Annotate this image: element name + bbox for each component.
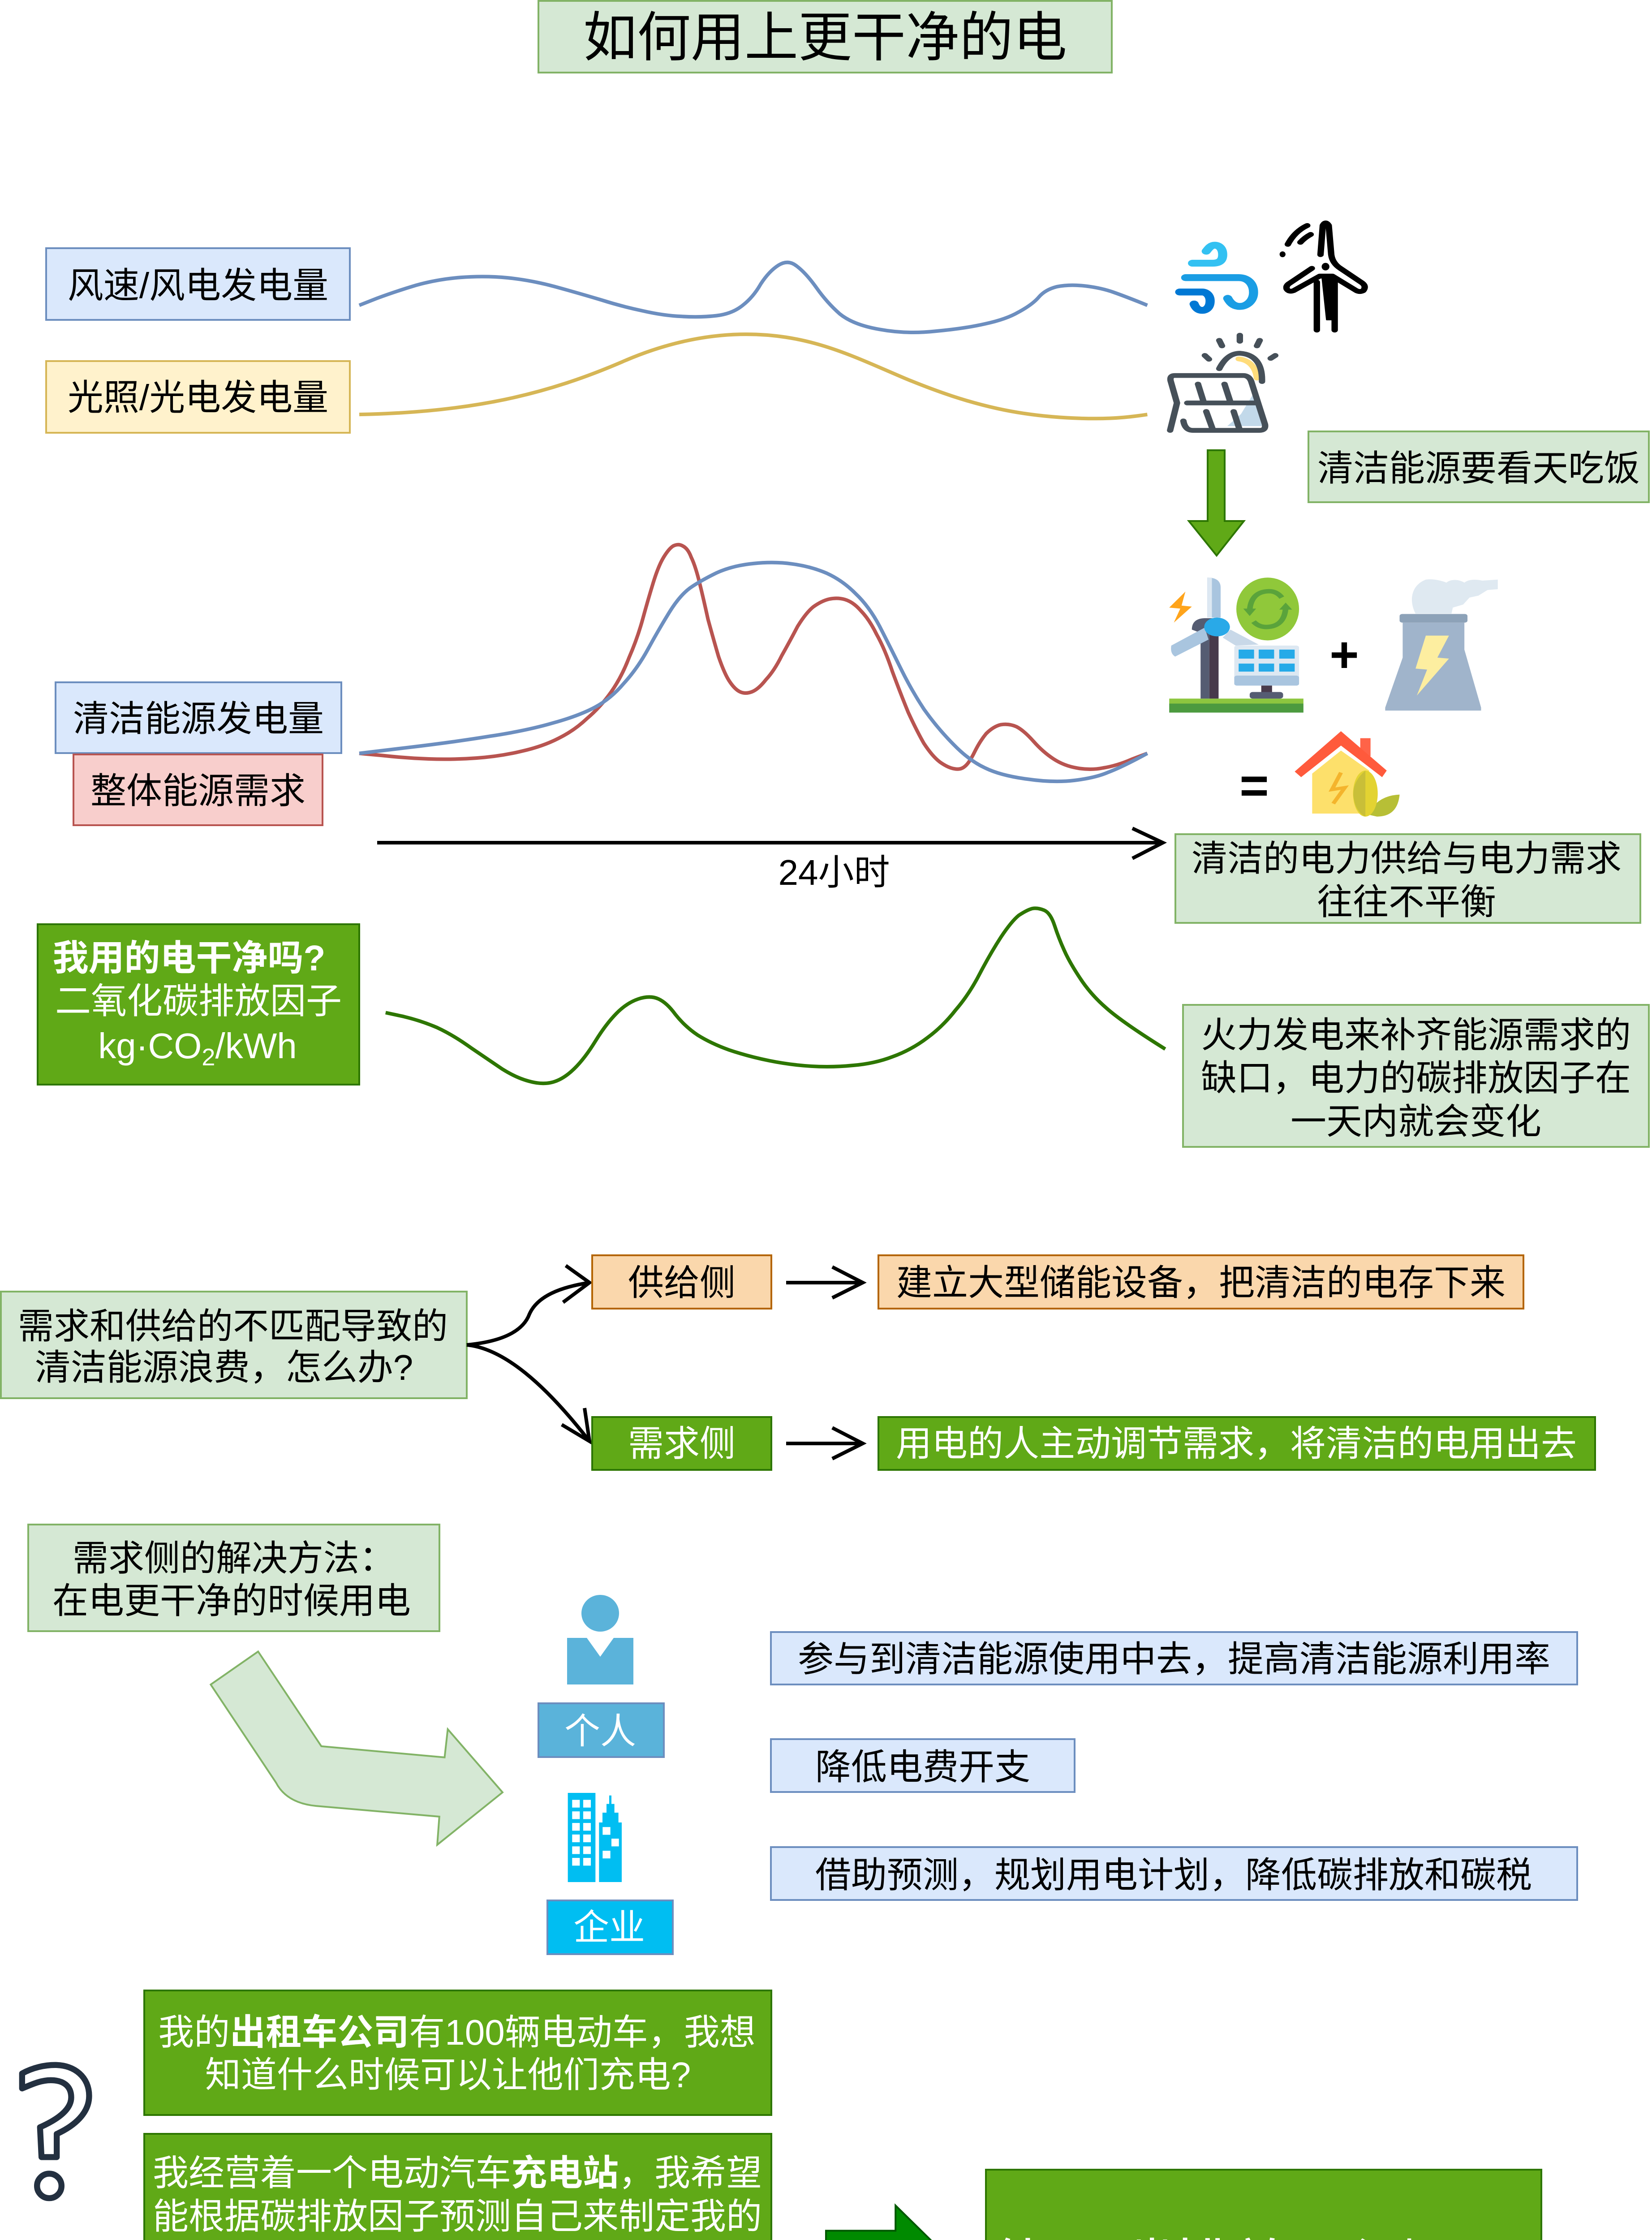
chart: clean generation curve <box>359 563 1147 781</box>
box: active demand adjustment: 用电的人主动调节需求，将清洁的电用出去 <box>896 1424 1577 1464</box>
callout: supply and demand imbalance: 清洁的电力供给与电力需求 <box>1192 839 1622 879</box>
box: company <box>547 1900 673 1954</box>
icon: wind and solar station <box>1169 577 1304 713</box>
label: solar power: 光照/光电发电量 <box>68 378 328 418</box>
arrow: 24-hour axis <box>377 828 1163 892</box>
panel: demand-side solution: 在电更干净的时候用电 <box>52 1581 411 1621</box>
box: supply side: 供给侧 <box>628 1263 736 1303</box>
scenario: charging station <box>144 2134 771 2240</box>
label: clean generation <box>56 682 341 753</box>
label: overall demand: 整体能源需求 <box>90 771 305 811</box>
label: solar power <box>46 361 350 433</box>
panel: carbon emission factor <box>38 924 359 1085</box>
box: individual <box>538 1703 664 1757</box>
arrow: down to combined sources <box>1189 450 1244 556</box>
panel: carbon emission factor: /kWh <box>215 1026 297 1066</box>
benefit: lower bills <box>771 1739 1075 1792</box>
label: wind power: 风速/风电发电量 <box>68 266 328 306</box>
chart: carbon factor curve <box>386 908 1165 1083</box>
box: individual: 个人 <box>564 1711 636 1751</box>
scenario: charging station: 能根据碳排放因子预测自己来制定我的 <box>153 2197 762 2236</box>
arrow: demand to adjustment <box>786 1428 863 1459</box>
arrow: to supply side <box>467 1266 589 1345</box>
callout: thermal power fills the gap: 火力发电来补齐能源需求的 <box>1201 1015 1631 1055</box>
scenario: taxi company: 我的出租车公司有100辆电动车，我想 <box>158 2012 756 2052</box>
scenario: charging station: 我经营着一个电动汽车充电站，我希望 <box>153 2153 762 2193</box>
callout: clean energy depends on weather: 清洁能源要看天吃饭 <box>1317 448 1640 488</box>
benefit: planning and lower carbon tax <box>771 1847 1577 1900</box>
callout: supply and demand imbalance <box>1175 834 1640 923</box>
icon: wind turbine <box>1280 223 1365 330</box>
box: company: 企业 <box>573 1908 645 1947</box>
icon: question mark <box>22 2065 89 2198</box>
box: demand side <box>592 1417 771 1470</box>
arrow: to forecasting tool <box>826 2206 968 2240</box>
panel: carbon emission factor: 2 <box>202 1044 215 1071</box>
box: supply side <box>592 1255 771 1309</box>
panel: carbon emission factor: 我用的电干净吗? <box>53 938 325 978</box>
callout: thermal power fills the gap <box>1183 1005 1649 1147</box>
arrow: supply to storage <box>786 1267 863 1298</box>
benefit: improve clean energy use: 参与到清洁能源使用中去，提高清洁能源利用率 <box>798 1639 1550 1679</box>
icon: wind <box>1180 245 1253 310</box>
question: mismatch waste: 需求和供给的不匹配导致的 <box>18 1306 448 1346</box>
callout: clean energy depends on weather <box>1308 431 1649 502</box>
icon: thermal power plant <box>1385 579 1498 711</box>
label: overall demand <box>73 754 323 825</box>
question: mismatch waste: 清洁能源浪费，怎么办? <box>35 1348 413 1387</box>
chart: demand curve <box>359 545 1147 769</box>
question: mismatch waste <box>1 1292 467 1398</box>
panel: use carbon forecasting tool <box>986 2170 1541 2240</box>
benefit: lower bills: 降低电费开支 <box>815 1747 1030 1787</box>
arrow: to demand side <box>467 1345 589 1441</box>
callout: supply and demand imbalance: 往往不平衡 <box>1317 882 1496 922</box>
arrow: bent to users <box>211 1651 503 1845</box>
title: 如何用上更干净的电 <box>583 8 1067 68</box>
box: demand side: 需求侧 <box>628 1424 736 1464</box>
plus sign: + <box>1329 627 1359 683</box>
callout: thermal power fills the gap: 一天内就会变化 <box>1291 1102 1541 1142</box>
label: clean generation: 清洁能源发电量 <box>73 699 324 739</box>
panel: carbon emission factor: kg·CO <box>98 1026 202 1066</box>
icon: green home <box>1295 731 1400 817</box>
panel: demand-side solution <box>28 1525 439 1631</box>
benefit: planning and lower carbon tax: 借助预测，规划用电计划，降低碳排放和碳税 <box>815 1855 1532 1895</box>
scenario: taxi company: 知道什么时候可以让他们充电? <box>205 2055 691 2095</box>
label: wind power <box>46 248 350 320</box>
chart: wind curve <box>359 263 1147 332</box>
panel: demand-side solution: 需求侧的解决方法： <box>73 1538 395 1578</box>
equals sign: = <box>1239 758 1269 814</box>
callout: thermal power fills the gap: 缺口，电力的碳排放因子在 <box>1201 1058 1631 1098</box>
chart: solar curve <box>359 334 1147 418</box>
icon: person <box>567 1595 633 1684</box>
panel: carbon emission factor: 二氧化碳排放因子 <box>55 981 342 1021</box>
arrow: 24-hour axis: 24小时 <box>779 853 890 892</box>
box: large storage: 建立大型储能设备，把清洁的电存下来 <box>896 1263 1506 1303</box>
scenario: taxi company <box>144 1990 771 2115</box>
icon: company buildings <box>568 1793 622 1882</box>
icon: solar panel <box>1170 335 1275 431</box>
